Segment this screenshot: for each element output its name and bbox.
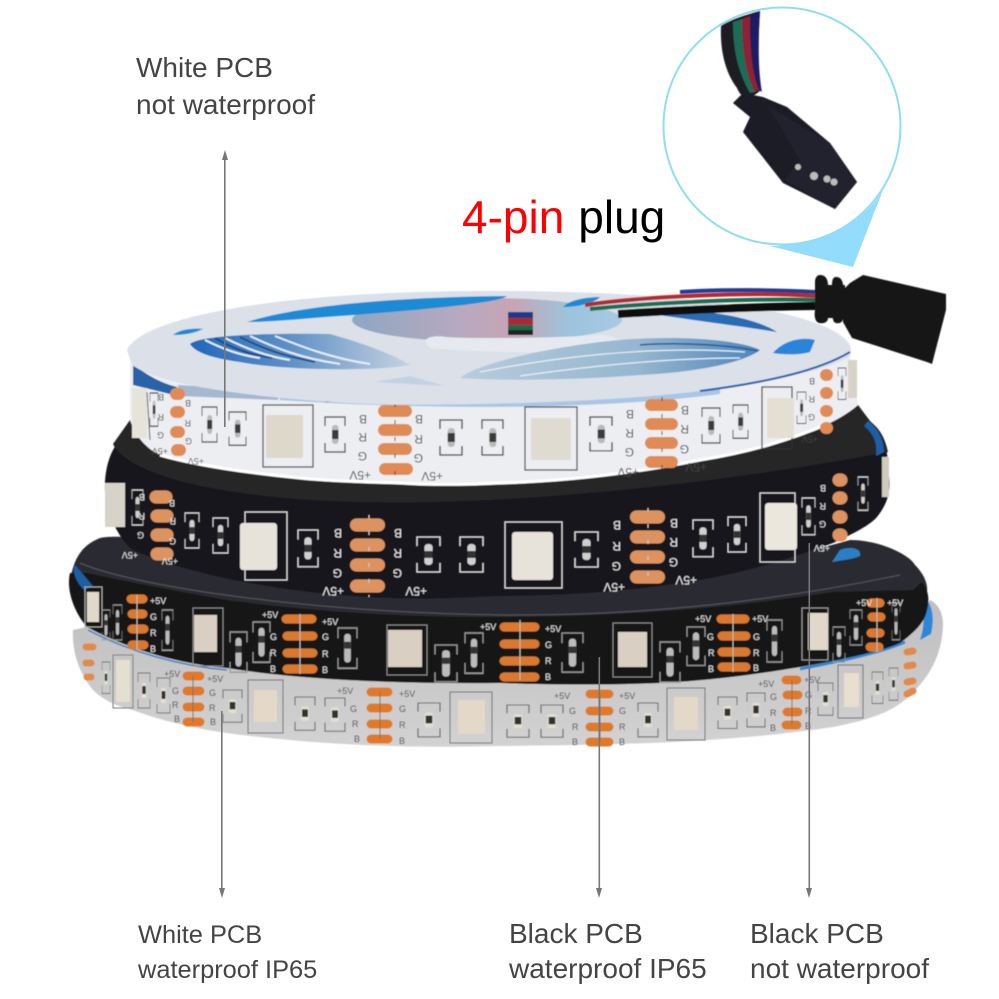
pad labels on waterproof white strip: G <box>770 692 777 702</box>
pad labels on black strip: R <box>669 535 678 549</box>
icon: zoomed plug with wires <box>721 11 857 209</box>
pad labels on white strip: G <box>414 451 423 465</box>
pad labels on white strip: R <box>184 418 191 428</box>
pad labels on black strip: R <box>393 546 402 560</box>
pad labels on black strip: +5V <box>405 584 427 598</box>
reel: black PCB waterproof IP65 <box>69 537 928 684</box>
pad labels on black strip: G <box>333 566 342 580</box>
pad labels on black strip: G <box>819 519 826 529</box>
reel: black PCB not waterproof <box>105 405 890 599</box>
pad labels on white strip: B <box>681 403 689 417</box>
pad labels on waterproof black strip: B <box>322 665 328 675</box>
pad labels on waterproof white strip: B <box>805 721 811 731</box>
label: white PCB not waterproof: not waterproof <box>136 89 315 120</box>
pad labels on waterproof black strip: G <box>753 632 760 642</box>
pad labels on black strip: +5V <box>675 573 697 587</box>
pad labels on white strip: +5V <box>617 465 639 479</box>
pad labels on waterproof white strip: R <box>770 708 777 718</box>
blue backing seen above strip <box>133 364 720 407</box>
pad labels on waterproof white strip: G <box>399 704 406 714</box>
arrow: to white non-waterproof strip <box>222 150 228 427</box>
pad labels on waterproof black strip: B <box>270 664 276 674</box>
pad labels on black strip: R <box>819 501 826 511</box>
reel: white PCB not waterproof <box>130 355 858 485</box>
pad labels on waterproof white strip: G <box>805 690 812 700</box>
pad labels on waterproof white strip: +5V <box>619 691 635 701</box>
LED chips on waterproof white strip <box>113 655 863 743</box>
pad labels on black strip: B <box>613 518 621 532</box>
pad labels on white strip: G <box>358 449 367 463</box>
pad labels on black strip: B <box>394 526 402 540</box>
pad labels on waterproof white strip: B <box>354 734 360 744</box>
pad labels on waterproof white strip: R <box>352 719 359 729</box>
pad labels on black strip: B <box>169 498 175 508</box>
pad labels on white strip: +5V <box>685 460 707 474</box>
pad labels on white strip: +5V <box>421 469 443 483</box>
pad labels on waterproof black strip: B <box>150 644 156 654</box>
label: black PCB not waterproof: not waterproof <box>750 953 929 984</box>
pad labels on waterproof black strip: +5V <box>887 598 903 608</box>
pad labels on black strip: B <box>139 492 145 502</box>
pad labels on waterproof black strip: B <box>753 663 759 673</box>
pad labels on black strip: G <box>669 555 678 569</box>
pad labels on black strip: +5V <box>162 556 178 566</box>
pad labels on white strip: +5V <box>152 446 168 456</box>
pad labels on waterproof white strip <box>164 669 820 747</box>
heading: 4-pin plug: 4-pin plug <box>462 191 665 243</box>
pad labels on black strip: R <box>138 511 145 521</box>
pad labels on white strip: B <box>359 412 367 426</box>
RGB cable <box>585 290 815 314</box>
pad labels on black strip: +5V <box>814 543 830 553</box>
pad labels on black strip: G <box>137 530 144 540</box>
pad labels on waterproof white strip: B <box>619 737 625 747</box>
arrow: to white waterproof strip <box>219 711 225 898</box>
arrow: to black waterproof strip <box>596 657 602 898</box>
pad labels on white strip: +5V <box>802 434 818 444</box>
pad labels on white strip <box>152 376 818 483</box>
pad labels on black strip: G <box>612 559 621 573</box>
pad labels on white strip: R <box>808 394 815 404</box>
pad labels on waterproof white strip: R <box>172 700 179 710</box>
pad labels on waterproof white strip: R <box>805 706 812 716</box>
pad labels on black strip: +5V <box>603 580 625 594</box>
pad labels on waterproof white strip: B <box>174 714 180 724</box>
pad labels on white strip: G <box>185 436 192 446</box>
pad labels on waterproof black strip: B <box>545 672 551 682</box>
callout tail <box>770 190 883 267</box>
pad labels on black strip: R <box>333 546 342 560</box>
pad labels on waterproof white strip: +5V <box>337 686 353 696</box>
pad labels on waterproof white strip: B <box>770 723 776 733</box>
pad labels on waterproof black strip: +5V <box>480 622 496 632</box>
pad labels on waterproof black strip: +5V <box>695 614 711 624</box>
pad labels on waterproof white strip: G <box>209 688 216 698</box>
pad labels on white strip: G <box>625 445 634 459</box>
pad labels on white strip: R <box>625 426 634 440</box>
reel top disc <box>127 291 851 405</box>
pad labels on waterproof black strip: R <box>150 628 157 638</box>
label: black PCB not waterproof: Black PCB <box>750 918 884 949</box>
pad labels on waterproof black strip: +5V <box>150 596 166 606</box>
pad labels on white strip: R <box>680 422 689 436</box>
LED chips on black strip <box>105 457 889 588</box>
pad labels on waterproof white strip: R <box>619 722 626 732</box>
pad labels on waterproof white strip: R <box>572 722 579 732</box>
pad labels on waterproof white strip: +5V <box>207 674 223 684</box>
pad labels on white strip: G <box>157 430 164 440</box>
pad labels on waterproof black strip: +5V <box>262 610 278 620</box>
magnifier circle <box>664 8 900 244</box>
pad labels on white strip: R <box>414 432 423 446</box>
photo: stacked LED strip reels <box>69 275 946 747</box>
pad labels on white strip: G <box>680 442 689 456</box>
pad labels on black strip: R <box>169 516 176 526</box>
pad labels on black strip: +5V <box>122 550 138 560</box>
pad labels on white strip: +5V <box>349 468 371 482</box>
pad labels on white strip: B <box>415 412 423 426</box>
pad labels on white strip: G <box>808 412 815 422</box>
pad labels on white strip: B <box>158 392 164 402</box>
pad labels on waterproof white strip: +5V <box>164 669 180 679</box>
pad labels on waterproof black strip: G <box>545 640 552 650</box>
pad labels on waterproof black strip: +5V <box>752 614 768 624</box>
LED chips on white strip <box>132 360 857 470</box>
pad labels on white strip: B <box>626 407 634 421</box>
pad labels on waterproof white strip: B <box>572 737 578 747</box>
pad labels on black strip: G <box>393 566 402 580</box>
pad labels on waterproof white strip: +5V <box>399 689 415 699</box>
label: white PCB not waterproof: White PCB <box>136 52 273 83</box>
label: black PCB waterproof IP65: waterproof IP65 <box>508 953 707 984</box>
pad labels on waterproof black strip: R <box>753 648 760 658</box>
pad labels on waterproof black strip: G <box>322 632 329 642</box>
pad labels on black strip: B <box>670 516 678 530</box>
pad labels on black strip: G <box>169 536 176 546</box>
pad labels on black strip: B <box>820 483 826 493</box>
pad labels on black strip: B <box>334 526 342 540</box>
pad labels on waterproof black strip: +5V <box>545 624 561 634</box>
pad labels on waterproof white strip: G <box>172 686 179 696</box>
pad labels on waterproof black strip: G <box>270 632 277 642</box>
pad labels on white strip: R <box>157 412 164 422</box>
pad labels on black strip <box>122 483 830 598</box>
pad labels on waterproof black strip: R <box>545 656 552 666</box>
spoke window left <box>190 334 410 369</box>
spoke window right <box>460 338 760 380</box>
label: white PCB waterproof IP65: waterproof IP65 <box>137 956 317 984</box>
label: black PCB waterproof IP65: Black PCB <box>509 918 643 949</box>
pad labels on white strip: R <box>358 430 367 444</box>
pad labels on waterproof white strip: B <box>210 717 216 727</box>
pad labels on white strip: B <box>809 376 815 386</box>
pad labels on waterproof black strip: G <box>150 612 157 622</box>
pad labels on waterproof black strip: R <box>708 648 715 658</box>
reel: white PCB waterproof IP65 <box>73 597 943 747</box>
LED chips on waterproof black strip <box>85 587 828 677</box>
pad labels on waterproof white strip: B <box>399 736 405 746</box>
pad labels on waterproof black strip: B <box>708 664 714 674</box>
pad labels on waterproof black strip: +5V <box>322 617 338 627</box>
pad labels on waterproof white strip: R <box>399 720 406 730</box>
pad labels on waterproof white strip: +5V <box>758 679 774 689</box>
pad labels on black strip: R <box>612 539 621 553</box>
pad labels on waterproof black strip: +5V <box>856 598 872 608</box>
pad labels on white strip: B <box>185 398 191 408</box>
pad labels on waterproof white strip: +5V <box>554 691 570 701</box>
pad labels on waterproof black strip: R <box>322 649 329 659</box>
connector plug <box>815 275 946 364</box>
pad labels on waterproof white strip: G <box>350 704 357 714</box>
callout: 4-pin plug magnifier <box>664 8 900 267</box>
pad labels on waterproof white strip: G <box>569 706 576 716</box>
pad labels on waterproof black strip <box>150 596 903 682</box>
pad labels on black strip: +5V <box>322 584 344 598</box>
pad labels on white strip: +5V <box>188 456 204 466</box>
arrow: to black non-waterproof strip <box>806 543 812 898</box>
pad labels on waterproof black strip: R <box>270 648 277 658</box>
pad labels on waterproof white strip: +5V <box>804 675 820 685</box>
pad labels on waterproof white strip: R <box>209 703 216 713</box>
pad labels on waterproof white strip: G <box>619 706 626 716</box>
label: white PCB waterproof IP65: White PCB <box>138 921 262 949</box>
pad labels on waterproof black strip: G <box>707 632 714 642</box>
